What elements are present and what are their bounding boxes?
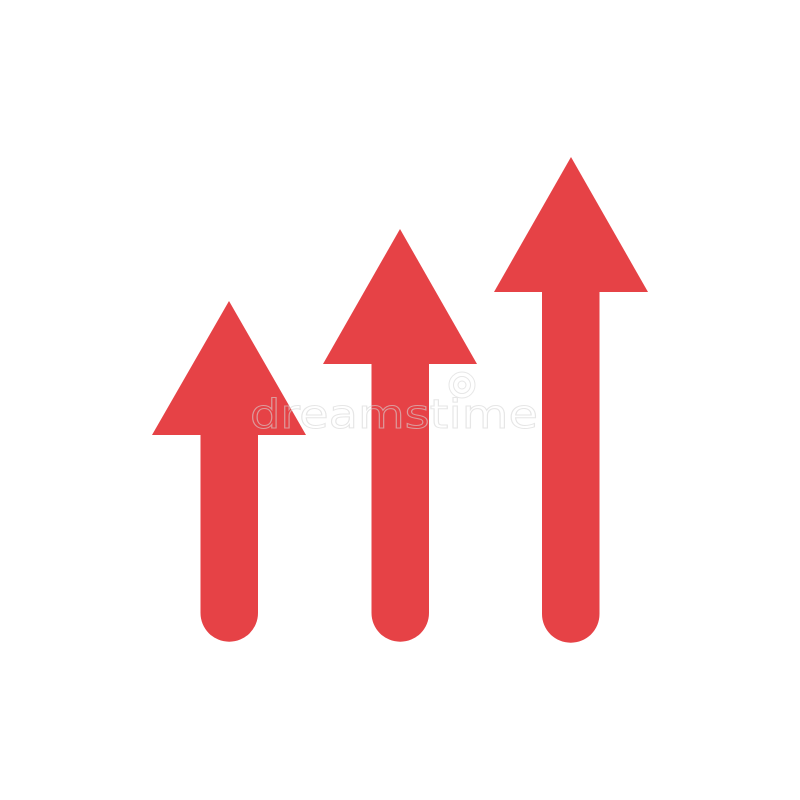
arrow: medium centre — [323, 229, 477, 642]
watermark logo: spiral — [449, 372, 475, 398]
arrow: short left — [152, 301, 306, 642]
watermark — [250, 372, 538, 438]
arrow: tall right — [494, 157, 648, 643]
watermark word: dreamstime — [250, 392, 538, 438]
